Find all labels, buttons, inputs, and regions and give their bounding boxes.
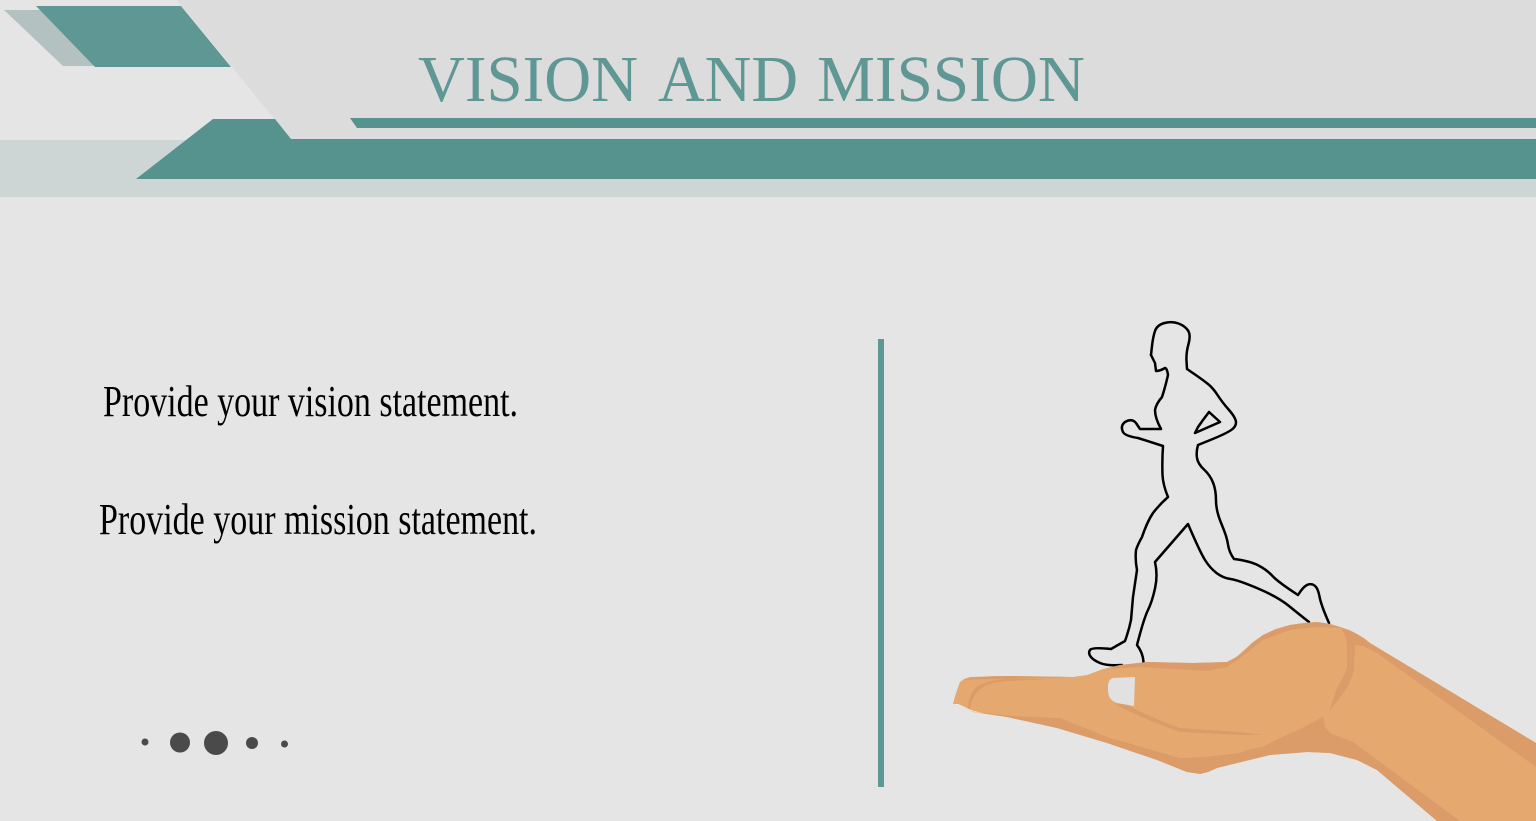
thumb top crease <box>1103 655 1240 671</box>
header banner <box>0 0 1536 197</box>
thumb base rim <box>1240 622 1341 658</box>
wrist crease <box>1329 627 1357 712</box>
fingernail edge <box>953 704 985 714</box>
finger top shade <box>963 676 1073 680</box>
pagination dots <box>142 731 288 755</box>
vertical divider <box>878 339 884 787</box>
title: VISION <box>418 43 638 116</box>
title: AND <box>658 43 798 116</box>
fingertip crease <box>968 679 1053 710</box>
palm and wrist underside shade <box>973 712 1460 821</box>
icon: runner outline <box>1089 322 1329 665</box>
thumbnail <box>1108 677 1135 706</box>
thumb underside crease <box>1113 703 1263 735</box>
vision statement: Provide your vision statement. <box>103 377 518 426</box>
title <box>418 43 1085 116</box>
icon: open hand <box>953 622 1536 821</box>
arm top shade <box>1355 634 1536 767</box>
hand silhouette <box>953 622 1536 821</box>
title: MISSION <box>817 43 1085 116</box>
mission statement: Provide your mission statement. <box>99 495 537 544</box>
